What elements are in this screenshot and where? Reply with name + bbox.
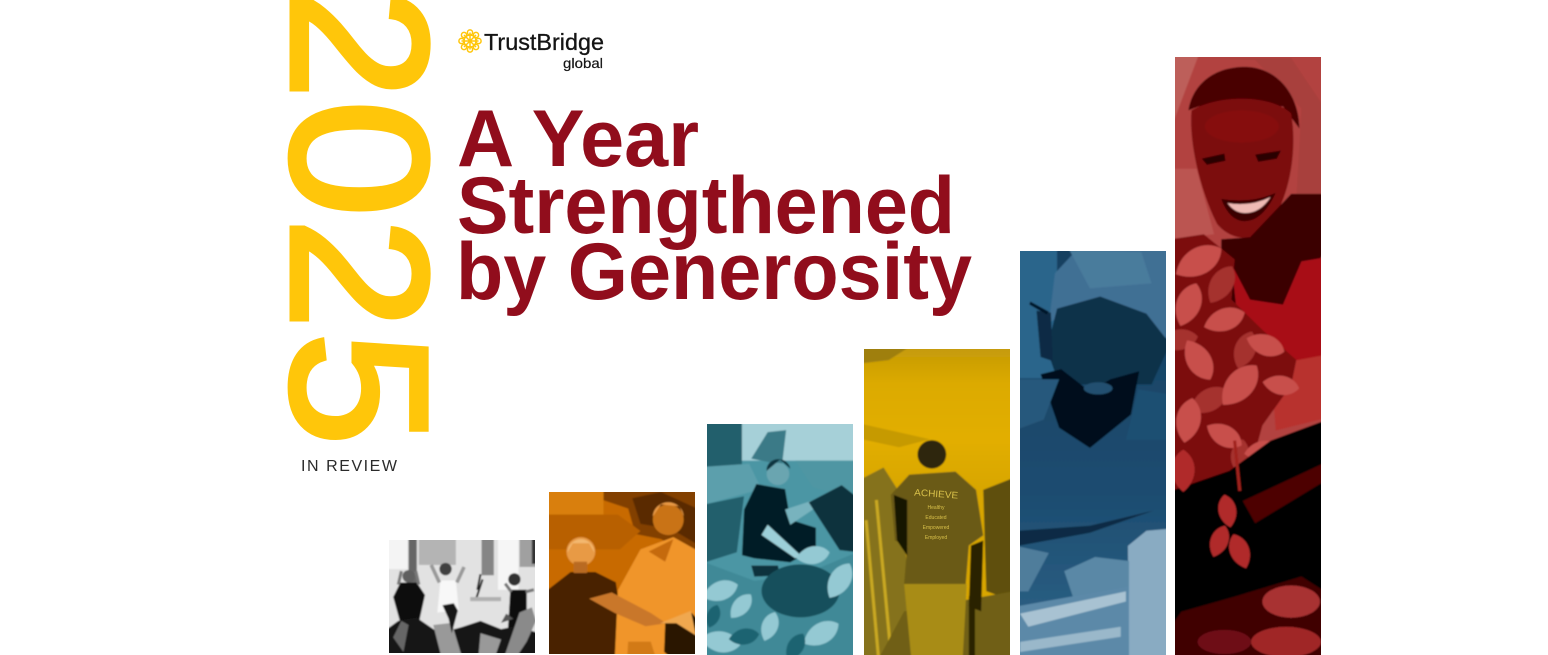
photo 4: yellow man in cornfield	[860, 347, 1014, 655]
vertical year: 2025: 0	[250, 100, 468, 217]
shirt print: ACHIEVE	[914, 487, 959, 502]
vertical year: 2025: 2	[250, 218, 468, 329]
title	[456, 94, 972, 317]
title: by Generosity	[456, 227, 972, 317]
shirt print: Educated	[925, 515, 947, 521]
vertical year: 2025	[250, 0, 468, 446]
subtitle: in review: IN REVIEW	[301, 458, 398, 475]
photo 2: orange elderly couple	[547, 490, 699, 655]
shirt print: Healthy	[928, 505, 945, 511]
photo 6: red smiling man with plants	[1175, 57, 1321, 655]
shirt print: Employed	[925, 535, 947, 541]
icon: yellow lattice flower	[459, 30, 481, 52]
title: Strengthened	[457, 161, 955, 251]
photo 1: grayscale worship stage	[387, 538, 539, 655]
logo: TrustBridge global	[459, 29, 604, 71]
photo 3: teal man gardening	[699, 422, 859, 655]
vertical year: 2025: 5	[250, 332, 468, 446]
logo sub-wordmark: global	[563, 55, 603, 71]
title: A Year	[457, 94, 699, 184]
logo wordmark: TrustBridge	[484, 29, 604, 55]
photo 5: blue man with mask carving	[1016, 247, 1170, 655]
shirt print	[914, 487, 959, 541]
shirt print: Empowered	[923, 525, 950, 531]
